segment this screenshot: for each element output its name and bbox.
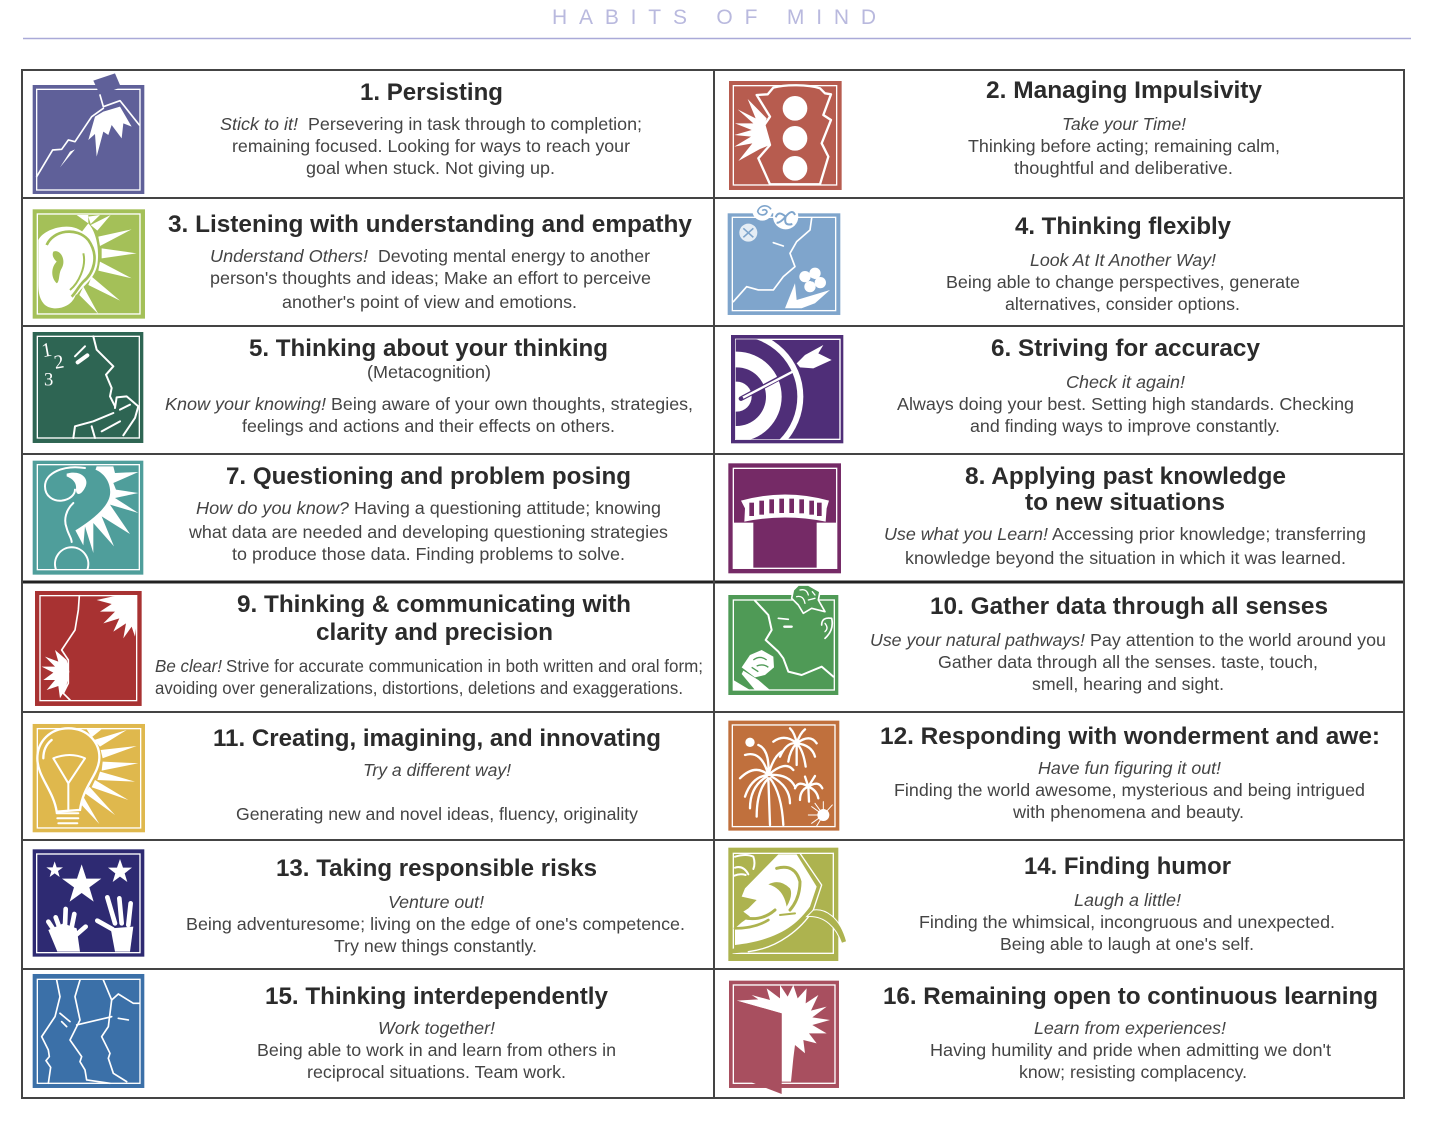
heading: 2. Managing Impulsivity [986, 77, 1263, 104]
heading [237, 591, 631, 646]
description [257, 1018, 616, 1082]
description: Always doing your best. Setting high standards. Checking [897, 394, 1354, 414]
description: (Metacognition) [367, 362, 491, 382]
description [897, 372, 1354, 436]
heading: 1. Persisting [360, 79, 503, 106]
heading: clarity and precision [316, 619, 553, 646]
panel: 6 Striving for accuracy [670, 330, 1354, 463]
description: Understand Others! [210, 246, 368, 266]
description: Laugh a little! [1074, 890, 1181, 910]
icon: mountain with flag [33, 73, 144, 194]
description [155, 656, 703, 698]
description: smell, hearing and sight. [1032, 674, 1224, 694]
icon: thinker with numbers: 2 [52, 352, 66, 374]
icon: target and arrow [731, 335, 844, 444]
icon: thinker with numbers: 3 [44, 369, 53, 390]
icon: light bulb [33, 724, 145, 832]
icon: profile with roses [728, 585, 838, 695]
description: Gather data through all the senses. taste, touch, [938, 652, 1318, 672]
panel: 4 Thinking flexibly [728, 201, 1300, 315]
description: How do you know? [196, 498, 349, 518]
heading: 6. Striving for accuracy [991, 335, 1261, 362]
icon: ear [33, 209, 145, 319]
description: Try new things constantly. [334, 936, 537, 956]
description: Know your knowing! [165, 394, 326, 414]
heading: 5. Thinking about your thinking [249, 335, 608, 362]
description [220, 114, 642, 178]
panel: 8 Applying past knowledge [728, 463, 1366, 573]
icon: thinker with numbers [33, 332, 143, 443]
icon: profile with flowers and swirls [728, 201, 840, 315]
description: Generating new and novel ideas, fluency, originality [236, 804, 638, 824]
panel: 7 Questioning [33, 461, 668, 575]
panel: 15 Interdependently [33, 974, 616, 1088]
description: Being adventuresome; living on the edge of one's competence. [186, 914, 685, 934]
description [930, 1018, 1331, 1082]
description: thoughtful and deliberative. [1014, 158, 1233, 178]
icon: fireworks [728, 721, 839, 831]
description: Strive for accurate communication in both written and oral form; [226, 656, 703, 676]
heading: 13. Taking responsible risks [276, 855, 597, 882]
panel: 13 Risks [33, 849, 685, 957]
icon: laughing face [728, 848, 847, 961]
description: goal when stuck. Not giving up. [306, 158, 555, 178]
description [186, 892, 685, 956]
icon: thinker with numbers: 1 [40, 339, 54, 362]
description: feelings and actions and their effects on others. [242, 416, 615, 436]
panel: 10 Gather data [728, 585, 1386, 695]
icon: bridge [728, 463, 841, 573]
description: Learn from experiences! [1034, 1018, 1226, 1038]
description: reciprocal situations. Team work. [307, 1062, 566, 1082]
heading: 9. Thinking & communicating with [237, 591, 631, 618]
description: Work together! [378, 1018, 495, 1038]
description: alternatives, consider options. [1005, 294, 1240, 314]
description: Persevering in task through to completion; [308, 114, 642, 134]
panel: 16 Continuous learning [729, 981, 1378, 1094]
description [165, 362, 693, 436]
description: Having a questioning attitude; knowing [354, 498, 661, 518]
panel: 12 Wonderment [728, 721, 1380, 831]
heading: 14. Finding humor [1024, 853, 1231, 880]
description: Check it again! [1066, 372, 1185, 392]
description [236, 760, 638, 824]
heading: 16. Remaining open to continuous learning [883, 983, 1378, 1010]
description: know; resisting complacency. [1019, 1062, 1247, 1082]
icon: hands reaching for stars [33, 849, 144, 957]
icon: speaking profile and sun [35, 591, 142, 706]
description: Use what you Learn! [884, 524, 1048, 544]
panel: 2 Managing Impulsivity [729, 77, 1280, 190]
panel: 1 Persisting [33, 73, 642, 194]
description: Look At It Another Way! [1030, 250, 1216, 270]
description: Finding the whimsical, incongruous and unexpected. [919, 912, 1335, 932]
description: Try a different way! [363, 760, 511, 780]
description: another's point of view and emotions. [282, 292, 577, 312]
description [894, 758, 1365, 822]
title: HABITS OF MIND [552, 6, 876, 29]
description: knowledge beyond the situation in which it was learned. [905, 548, 1346, 568]
description [870, 630, 1386, 694]
description: person's thoughts and ideas; Make an effort to perceive [210, 268, 651, 288]
description [968, 114, 1280, 178]
heading: 12. Responding with wonderment and awe: [880, 723, 1380, 750]
icon: open door with sunburst [729, 981, 839, 1094]
panel: 11 Creating [33, 724, 661, 832]
description [919, 890, 1335, 954]
description: Use your natural pathways! [870, 630, 1085, 650]
description: Accessing prior knowledge; transferring [1052, 524, 1366, 544]
description: what data are needed and developing questioning strategies [188, 522, 668, 542]
panel: 3 Listening [33, 209, 693, 319]
description: remaining focused. Looking for ways to reach your [232, 136, 630, 156]
description: avoiding over generalizations, distortions, deletions and exaggerations. [155, 678, 683, 698]
description: Thinking before acting; remaining calm, [968, 136, 1280, 156]
heading: 4. Thinking flexibly [1015, 213, 1232, 240]
description: Being aware of your own thoughts, strategies, [331, 394, 693, 414]
description: Devoting mental energy to another [378, 246, 650, 266]
description: Being able to work in and learn from others in [257, 1040, 616, 1060]
heading: 7. Questioning and problem posing [226, 463, 631, 490]
description: Take your Time! [1062, 114, 1186, 134]
description: Finding the world awesome, mysterious and being intrigued [894, 780, 1365, 800]
description: Being able to laugh at one's self. [1000, 934, 1254, 954]
heading [965, 463, 1286, 516]
heading: to new situations [1025, 489, 1225, 516]
description: Venture out! [388, 892, 484, 912]
panel: 14 Humor [728, 848, 1335, 961]
description: Being able to change perspectives, generate [946, 272, 1300, 292]
icon: linked profiles [33, 974, 144, 1088]
heading: 11. Creating, imagining, and innovating [213, 725, 661, 752]
description: Stick to it! [220, 114, 298, 134]
description: Having humility and pride when admitting we don't [930, 1040, 1331, 1060]
description: with phenomena and beauty. [1012, 802, 1244, 822]
description: Have fun figuring it out! [1038, 758, 1221, 778]
panel: 9 Communicating [35, 591, 703, 706]
description: to produce those data. Finding problems to solve. [232, 544, 625, 564]
description: Be clear! [155, 656, 222, 676]
description: and finding ways to improve constantly. [970, 416, 1280, 436]
heading: 15. Thinking interdependently [265, 983, 609, 1010]
heading: 8. Applying past knowledge [965, 463, 1286, 490]
description [884, 524, 1366, 568]
description [946, 250, 1300, 314]
icon: question mark [33, 461, 143, 575]
description: Pay attention to the world around you [1090, 630, 1386, 650]
heading: 10. Gather data through all senses [930, 593, 1328, 620]
panel: 5 Metacognition [33, 332, 693, 443]
icon: traffic light [729, 81, 842, 190]
description [188, 498, 668, 564]
heading: 3. Listening with understanding and empathy [168, 211, 693, 238]
description [210, 246, 651, 312]
